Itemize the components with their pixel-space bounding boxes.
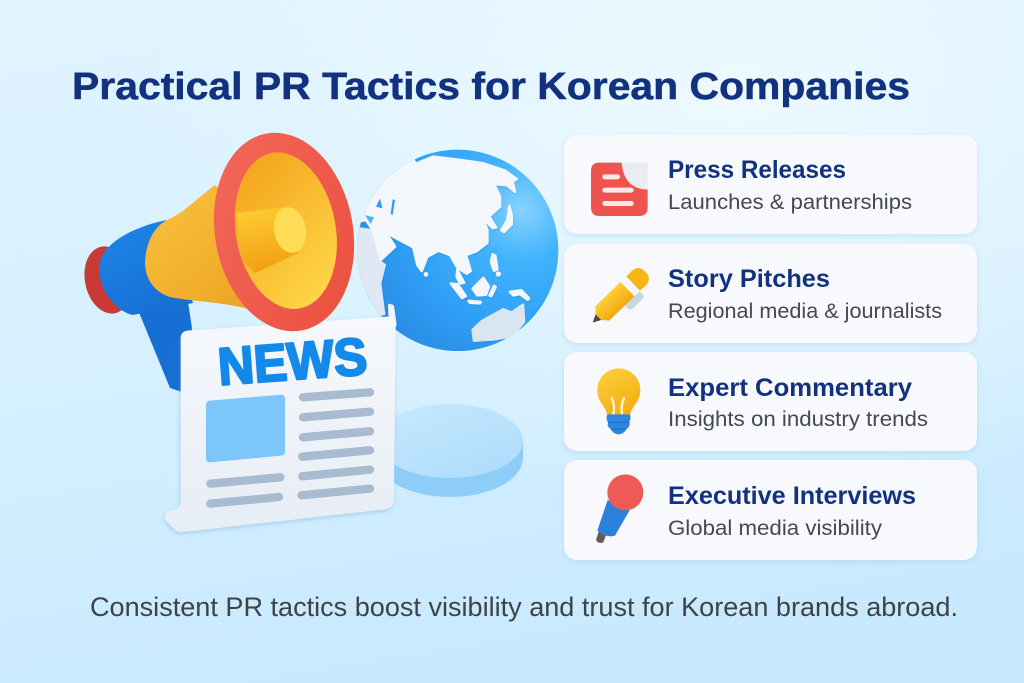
NEWS headline: NEWS [216, 327, 369, 397]
card: story pitches [564, 244, 977, 343]
megaphone back cap [78, 242, 138, 318]
illustration: newspaper [165, 317, 396, 532]
illustration: globe on pedestal [350, 147, 558, 497]
footer tagline: Consistent PR tactics boost visibility and trust for Korean brands abroad. [90, 592, 958, 622]
paper sheet [165, 317, 396, 532]
megaphone driver [236, 205, 310, 273]
title: Practical PR Tactics for Korean Companies [72, 66, 910, 108]
globe [350, 147, 558, 351]
illustration: megaphone [78, 122, 369, 342]
icon: microphone [596, 474, 643, 543]
pedestal disc [377, 404, 523, 497]
text: story pitches: Story Pitches [668, 265, 830, 293]
text: story pitches [668, 265, 942, 323]
text: press releases [668, 156, 912, 214]
megaphone blue body [99, 220, 193, 315]
megaphone yellow cone [145, 185, 270, 310]
text: expert commentary: Insights on industry trends [668, 408, 928, 431]
text: executive interviews: Executive Interviews [668, 482, 916, 510]
text: executive interviews: Global media visibility [668, 517, 883, 540]
text: press releases: Launches & partnerships [668, 191, 912, 214]
icon: document [591, 163, 648, 216]
card: press releases [564, 135, 977, 234]
icon: pencil [586, 265, 658, 335]
text: executive interviews [668, 482, 916, 540]
card: executive interviews [564, 460, 977, 560]
article lines [210, 392, 370, 504]
picture box [206, 395, 285, 462]
text: story pitches: Regional media & journalists [668, 300, 942, 323]
continents [350, 147, 529, 341]
icon: light bulb [597, 368, 640, 434]
megaphone handle [138, 302, 192, 392]
text: expert commentary: Expert Commentary [668, 374, 912, 402]
text: press releases: Press Releases [668, 156, 846, 184]
megaphone rim [199, 122, 369, 342]
card: expert commentary [564, 352, 977, 451]
text: expert commentary [668, 374, 928, 431]
